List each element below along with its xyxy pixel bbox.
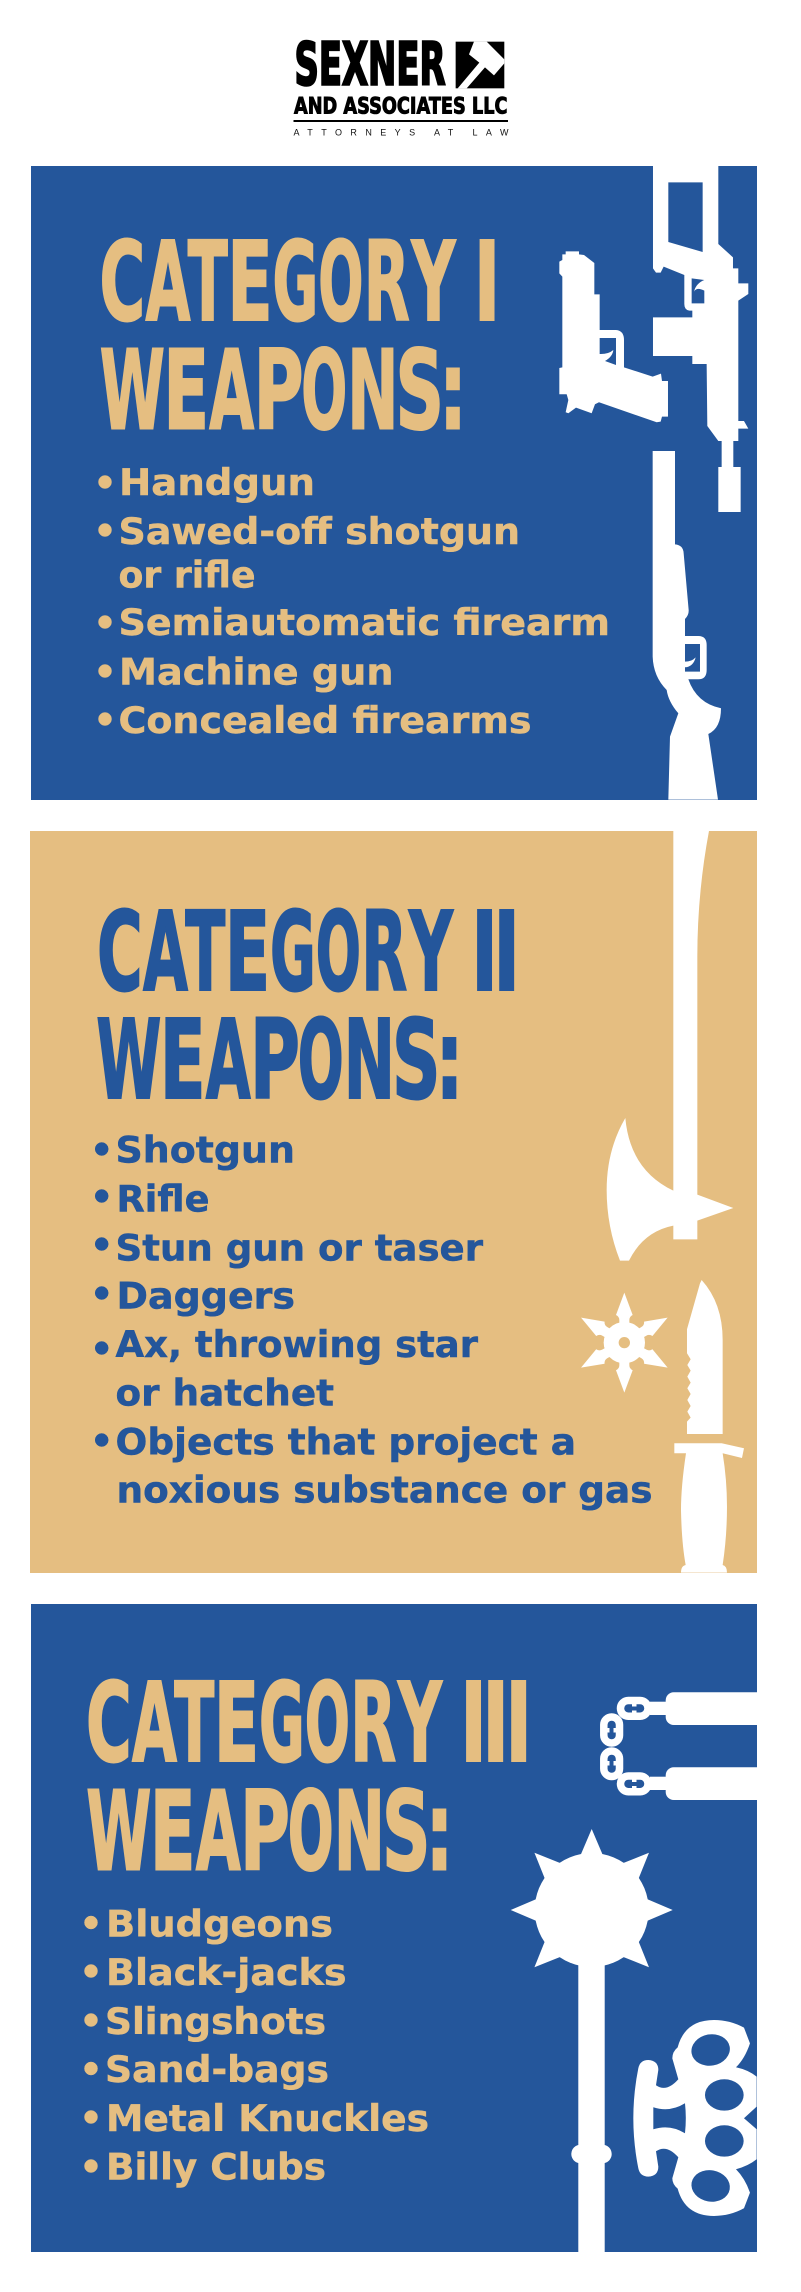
list: category II weapons: Ax, throwing star (116, 1323, 478, 1366)
heading: category I weapons: R (364, 218, 410, 346)
heading: category II weapons: G (270, 888, 316, 1016)
heading: category II weapons: N (344, 996, 395, 1124)
heading: category I weapons: W (100, 326, 165, 454)
heading: category I weapons: E (227, 218, 273, 346)
heading: category III weapons: T (174, 1659, 214, 1787)
icon: handgun (559, 251, 668, 422)
list: category II weapons: Objects that project a (116, 1420, 576, 1464)
list: category I weapons: Semiautomatic firearm (118, 601, 610, 644)
heading: category II weapons: O (298, 996, 344, 1124)
heading: category III weapons: Y (397, 1659, 443, 1787)
heading: category II weapons: I (471, 888, 498, 1016)
panel: category I (31, 166, 757, 800)
list: category III weapons: Bludgeons (106, 1902, 333, 1946)
logo: Sexner and Associates LLC (294, 30, 509, 138)
heading: category III weapons: I (460, 1659, 487, 1787)
heading: category III weapons: P (240, 1768, 290, 1896)
list: category III weapons: Billy Clubs (106, 2146, 326, 2188)
heading: category II weapons: E (225, 888, 270, 1016)
heading: category II weapons: P (250, 996, 300, 1124)
heading: category I weapons: G (272, 218, 318, 346)
heading: category II weapons: A (206, 996, 251, 1124)
heading: category III weapons: G (259, 1659, 305, 1787)
icon: spiked mace (511, 1829, 673, 2252)
heading: category III weapons: S (382, 1768, 430, 1896)
heading: category III weapons: R (350, 1659, 396, 1787)
heading: category II weapons: E (160, 996, 206, 1124)
list: category I weapons: Concealed firearms (118, 699, 532, 742)
list: category II weapons (95, 1128, 652, 1512)
heading: category II weapons: I (493, 888, 520, 1016)
heading: category II weapons: W (96, 996, 161, 1124)
list: category III weapons: Sand-bags (105, 2048, 329, 2091)
heading: category I weapons: : (439, 326, 467, 454)
logo tagline: ATTORNEYS AT LAW (294, 128, 509, 138)
list: category III weapons (84, 1902, 429, 2188)
heading: category I weapons: N (347, 326, 398, 454)
heading: category I weapons: C (100, 218, 145, 346)
heading: category I weapons: E (163, 326, 209, 454)
heading: category III weapons: I (482, 1659, 509, 1787)
list: category II weapons: noxious substance or gas (116, 1468, 652, 1512)
heading: category II weapons: T (185, 888, 225, 1016)
list: category III weapons: Metal Knuckles (106, 2097, 429, 2140)
logo wordmark: Sexner: SEXNER (294, 30, 446, 98)
list: category III weapons: Black-jacks (106, 1951, 346, 1994)
list: category II weapons: Rifle (116, 1178, 210, 1220)
icon: battle axe (607, 831, 733, 1261)
list: category II weapons: Stun gun or taser (116, 1226, 483, 1270)
heading: category I weapons: I (474, 218, 500, 346)
list: category I weapons: or rifle (118, 554, 256, 596)
heading: category I weapons: T (188, 218, 228, 346)
heading: category I weapons (100, 218, 500, 454)
list: category II weapons: or hatchet (116, 1372, 334, 1414)
icon: shotgun (653, 451, 721, 800)
heading: category II weapons: O (316, 888, 361, 1016)
list: category I weapons (98, 461, 610, 742)
heading: category III weapons: E (214, 1659, 259, 1787)
panel: category III (31, 1604, 776, 2252)
heading: category I weapons: O (301, 326, 347, 454)
logo wordmark: and associates: AND ASSOCIATES LLC (294, 94, 508, 120)
list: category III weapons: Slingshots (105, 2000, 326, 2043)
heading: category III weapons: A (196, 1768, 241, 1896)
heading: category III weapons: C (86, 1659, 132, 1787)
heading: category I weapons: Y (410, 218, 456, 346)
heading: category II weapons: : (436, 996, 464, 1124)
icon: machine pistol (653, 166, 748, 512)
icon: gavel (456, 42, 504, 88)
list: category II weapons: Daggers (116, 1274, 295, 1318)
heading: category II weapons: S (392, 996, 440, 1124)
list: category I weapons: Handgun (119, 461, 315, 504)
heading: category III weapons: N (334, 1768, 385, 1896)
heading: category I weapons: A (209, 326, 254, 454)
heading: category II weapons: C (97, 888, 143, 1016)
icon: brass knuckles (633, 2020, 757, 2216)
heading: category III weapons: O (305, 1659, 350, 1787)
heading: category I weapons: P (254, 326, 304, 454)
heading: category I weapons: S (396, 326, 444, 454)
heading: category II weapons: R (361, 888, 407, 1016)
heading: category III weapons: : (426, 1768, 454, 1896)
heading: category II weapons (96, 888, 520, 1124)
list: category I weapons: Sawed-off shotgun (118, 510, 520, 553)
heading: category III weapons: A (132, 1659, 177, 1787)
panel: category II (30, 831, 757, 1573)
heading: category I weapons: A (146, 218, 190, 346)
icon: nunchaku (604, 1692, 776, 1800)
heading: category III weapons (86, 1659, 532, 1896)
heading: category II weapons: Y (408, 888, 454, 1016)
heading: category III weapons: I (505, 1659, 532, 1787)
icon: throwing star (577, 1293, 672, 1393)
heading: category III weapons: E (150, 1768, 196, 1896)
heading: category III weapons: W (86, 1768, 151, 1896)
heading: category III weapons: O (288, 1768, 334, 1896)
icon: combat knife (674, 1280, 744, 1573)
heading: category I weapons: O (318, 218, 363, 346)
heading: category II weapons: A (143, 888, 188, 1016)
list: category I weapons: Machine gun (119, 650, 394, 694)
list: category II weapons: Shotgun (116, 1128, 295, 1172)
